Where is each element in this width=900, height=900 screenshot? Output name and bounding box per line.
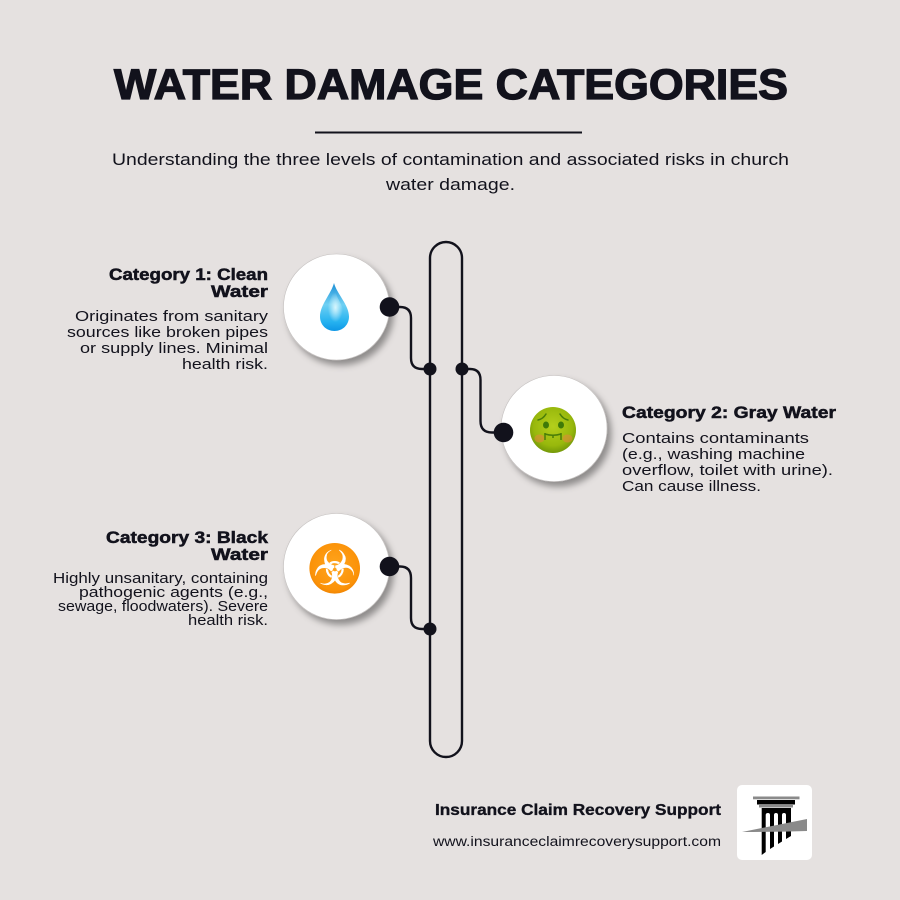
- connector: category 3: [390, 566, 436, 636]
- category 1 description: Originates from sanitary: [75, 309, 269, 325]
- panel: category 2 gray water: [494, 376, 837, 495]
- footer company name: Insurance Claim Recovery Support: [435, 802, 722, 819]
- title: WATER DAMAGE CATEGORIES: [114, 61, 788, 109]
- footer website: www.insuranceclaimrecoverysupport.com: [432, 834, 721, 849]
- category 3 description: Highly unsanitary, containing: [53, 571, 268, 587]
- category 3 description: sewage, floodwaters). Severe: [58, 599, 268, 615]
- icon: nauseated face in circle: [494, 376, 607, 482]
- category 3 heading: Water: [211, 546, 269, 564]
- category 1 heading: Water: [211, 283, 269, 301]
- category 1 heading: Category 1: Clean: [109, 266, 268, 284]
- subtitle: water damage.: [385, 175, 515, 194]
- category 1 description: health risk.: [182, 357, 268, 373]
- category 3 description: health risk.: [188, 613, 268, 629]
- icon: biohazard in circle: [284, 514, 399, 620]
- category 2 heading: Category 2: Gray Water: [622, 404, 837, 422]
- category 1 description: sources like broken pipes: [67, 325, 268, 341]
- connector: category 1: [390, 307, 436, 376]
- connector: category 2: [456, 362, 503, 432]
- category 1 heading: [109, 266, 269, 301]
- category 1 description: [67, 309, 269, 373]
- category 2 description: overflow, toilet with urine).: [622, 463, 833, 479]
- panel: category 3 black water: [53, 514, 399, 629]
- icon: biohazard in circle: ☣: [313, 541, 356, 597]
- category 2 description: Contains contaminants: [622, 431, 809, 447]
- category 2 description: [622, 431, 833, 495]
- logo: [737, 785, 812, 860]
- category 2 description: (e.g., washing machine: [622, 447, 805, 463]
- category 3 heading: Category 3: Black: [106, 529, 269, 547]
- central timeline rail: [430, 242, 462, 757]
- category 3 description: [53, 571, 268, 629]
- panel: category 1 clean water: [67, 254, 399, 373]
- category 1 description: or supply lines. Minimal: [80, 341, 268, 357]
- category 3 description: pathogenic agents (e.g.,: [79, 585, 268, 601]
- category 3 heading: [106, 529, 269, 564]
- icon: water drop in circle: [284, 254, 399, 360]
- category 2 description: Can cause illness.: [622, 479, 761, 495]
- subtitle: [112, 150, 789, 194]
- subtitle: Understanding the three levels of contamination and associated risks in church: [112, 150, 789, 169]
